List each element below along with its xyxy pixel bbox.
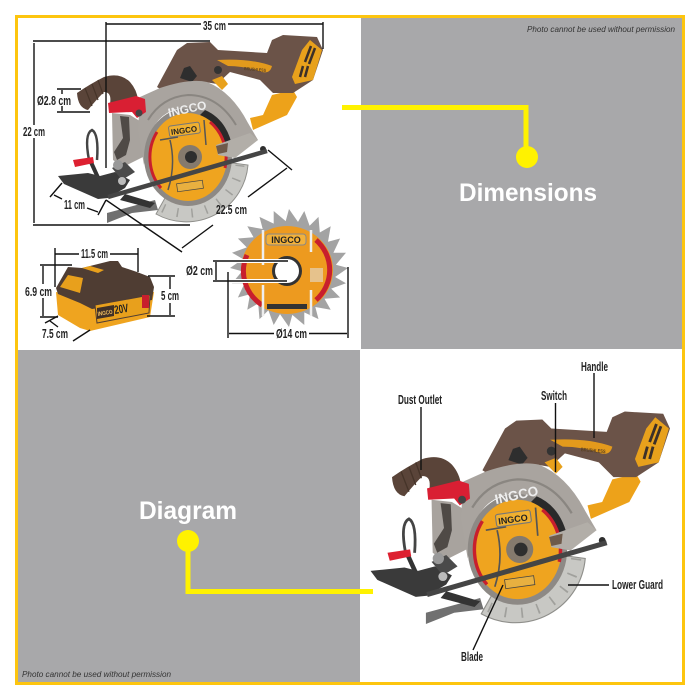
saw guard brand: INGCO (167, 98, 208, 120)
label: Lower Guard: Lower Guard (612, 578, 663, 592)
saw blade brand: INGCO (498, 512, 528, 526)
dimension: dust outlet 2.8 cm (37, 89, 90, 112)
dimension: battery 5 cm: 5 cm (161, 289, 179, 303)
dimension: battery width 7.5 cm (42, 316, 90, 341)
dimension: bore 2 cm (186, 261, 288, 281)
dimension: height 22 cm (23, 41, 210, 225)
blade brand: INGCO (271, 235, 301, 245)
dimension: base length 22.5 cm: 22.5 cm (216, 203, 247, 217)
dimension: base length 22.5 cm (106, 150, 292, 252)
label: Dust Outlet (398, 393, 443, 470)
dimension: blade diameter 14 cm (228, 267, 348, 341)
dimension: blade diameter 14 cm: Ø14 cm (276, 327, 307, 341)
connector dot: dimensions (516, 146, 538, 168)
dimension: battery height 6.9 cm: 6.9 cm (25, 285, 52, 299)
heading: Dimensions: Dimensions (459, 179, 597, 207)
battery brand: INGCO (97, 310, 113, 318)
dimension: battery 5 cm (147, 276, 179, 316)
heading: Diagram: Diagram (139, 497, 237, 525)
dimension: overall length 35 cm: 35 cm (203, 19, 226, 33)
dimension: battery length 11.5 cm: 11.5 cm (81, 247, 108, 261)
connector: dimensions (342, 108, 526, 157)
battery voltage: 20V (113, 301, 129, 317)
dimension: base width 11 cm: 11 cm (64, 198, 85, 212)
label: Handle: Handle (581, 360, 608, 374)
label: Handle (581, 360, 608, 438)
connector dot: diagram (177, 530, 199, 552)
panel: diagram grey background (18, 350, 360, 682)
saw product image bottom (371, 412, 670, 624)
dimension: battery height 6.9 cm (25, 265, 72, 317)
label: Switch: Switch (541, 389, 567, 403)
connector: diagram (188, 541, 373, 592)
permission note bottom: Photo cannot be used without permission (22, 670, 172, 679)
permission note top: Photo cannot be used without permission (527, 25, 676, 34)
dimension: battery width 7.5 cm: 7.5 cm (42, 327, 68, 341)
label: Lower Guard (568, 578, 663, 592)
saw product image top (58, 35, 323, 223)
brushless mark: BRUSHLESS (244, 66, 266, 73)
label: Blade (461, 585, 503, 664)
dimension: bore 2 cm: Ø2 cm (186, 264, 213, 278)
dimension: base width 11 cm (50, 183, 106, 215)
label: Blade: Blade (461, 650, 483, 664)
panel: dimensions grey background (361, 18, 682, 349)
label: Switch (541, 389, 567, 472)
dimension: height 22 cm: 22 cm (23, 125, 45, 139)
dimension: dust outlet 2.8 cm: Ø2.8 cm (37, 94, 71, 108)
brushless mark: BRUSHLESS (581, 447, 606, 455)
saw guard brand: INGCO (493, 483, 540, 507)
dimension: overall length 35 cm (106, 19, 323, 168)
dimension: battery length 11.5 cm (55, 247, 138, 287)
label: Dust Outlet: Dust Outlet (398, 393, 443, 407)
saw blade brand: INGCO (170, 124, 198, 137)
battery image (56, 261, 154, 331)
blade image (230, 209, 348, 327)
